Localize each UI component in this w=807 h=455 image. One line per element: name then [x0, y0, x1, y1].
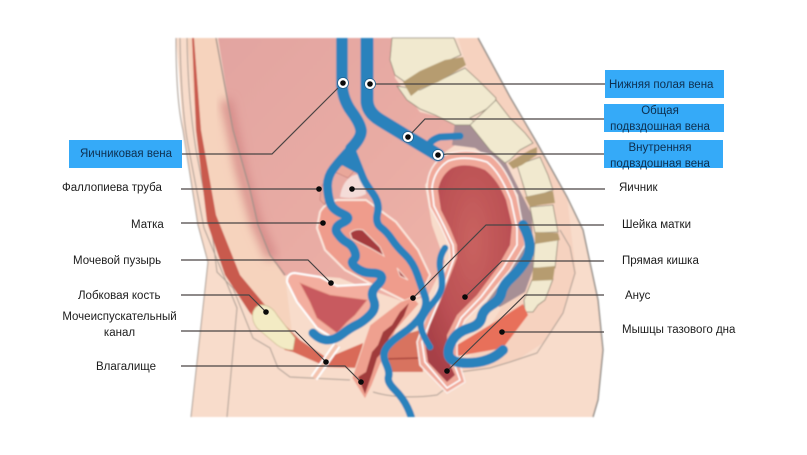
label: vagina: Влагалище — [96, 361, 156, 373]
label box: ovarian vein — [69, 140, 182, 168]
label box: common iliac vein: подвздошная вена — [610, 121, 710, 133]
back inner tissue — [458, 38, 576, 372]
spine — [390, 38, 560, 312]
line: cervix — [413, 225, 604, 298]
callout lines and markers — [181, 78, 605, 385]
line: rectum — [465, 261, 604, 297]
label: urethra: Мочеиспускательный — [62, 311, 177, 323]
anatomical illustration — [176, 30, 603, 425]
uterine vein funnel — [341, 155, 358, 174]
line: uterus — [181, 222, 323, 224]
label: uterus: Матка — [131, 219, 164, 231]
label: fallopian tube: Фаллопиева труба — [62, 182, 162, 194]
label: pelvic floor muscles: Мышцы тазового дна — [622, 324, 736, 336]
label box: common iliac vein — [604, 104, 724, 133]
line: inferior vena cava — [370, 83, 605, 85]
iliac branch — [428, 136, 460, 147]
label box: common iliac vein: Общая — [641, 105, 679, 117]
back edge outline — [478, 38, 603, 417]
label box: internal iliac vein: Внутренняя — [628, 142, 692, 154]
uterine vein — [352, 150, 426, 425]
label: ovary: Яичник — [619, 182, 658, 194]
label box: internal iliac vein — [604, 140, 723, 170]
line: urethra — [181, 331, 326, 362]
veins — [313, 30, 530, 425]
black markers — [263, 186, 505, 385]
label: pubic bone: Лобковая кость — [78, 290, 160, 302]
uterus — [317, 200, 430, 301]
cavity shaded edge — [226, 100, 272, 258]
label box: internal iliac vein: подвздошная вена — [610, 158, 710, 170]
line: ovary — [352, 188, 605, 190]
infographic: female pelvic veins — [62, 36, 736, 418]
bladder — [287, 273, 376, 340]
label box: inferior vena cava: Нижняя полая вена — [609, 79, 714, 91]
ovarian vein upper trunk — [342, 30, 361, 148]
line: vagina — [181, 366, 361, 382]
label: urethra second line: канал — [104, 327, 135, 339]
line: common iliac vein — [408, 119, 604, 137]
pubic bone — [252, 305, 295, 350]
rectum — [417, 151, 525, 393]
fallopian tube — [320, 164, 355, 205]
label: rectum: Прямая кишка — [622, 255, 699, 267]
intervertebral discs — [403, 57, 560, 281]
abdominal wall outline — [216, 38, 285, 275]
tissue behind rectum — [452, 122, 533, 307]
urethra — [314, 345, 337, 378]
label: bladder: Мочевой пузырь — [73, 255, 161, 267]
line: ovarian vein — [182, 88, 338, 154]
rectal vein — [448, 225, 530, 363]
label box: ovarian vein: Яичниковая вена — [80, 148, 173, 160]
left labels — [62, 182, 177, 373]
line: bladder — [181, 260, 331, 283]
skin lines — [176, 38, 575, 417]
vertebrae — [390, 38, 558, 312]
line: anus — [447, 295, 604, 371]
inferior vena cava — [367, 30, 438, 155]
body skin silhouette — [176, 38, 603, 417]
right labels — [619, 182, 736, 336]
ovarian vein lower winding part — [313, 148, 382, 340]
line: pubic bone — [181, 295, 266, 312]
ovary — [340, 174, 366, 198]
label: anus: Анус — [625, 290, 651, 302]
label: cervix: Шейка матки — [622, 219, 691, 231]
line: fallopian tube — [181, 188, 319, 190]
line: internal iliac vein — [438, 154, 604, 155]
abdominal wall layer — [187, 38, 293, 340]
pelvic floor muscle — [457, 304, 528, 356]
pubic and perineal muscle — [250, 303, 423, 372]
abdominal muscle — [192, 38, 265, 313]
ringed markers — [338, 78, 444, 160]
cervical vein — [421, 248, 445, 347]
abdominal cavity — [218, 38, 470, 302]
line: pelvic floor muscles — [502, 331, 604, 333]
vagina — [352, 297, 419, 399]
label box: inferior vena cava — [605, 70, 724, 98]
